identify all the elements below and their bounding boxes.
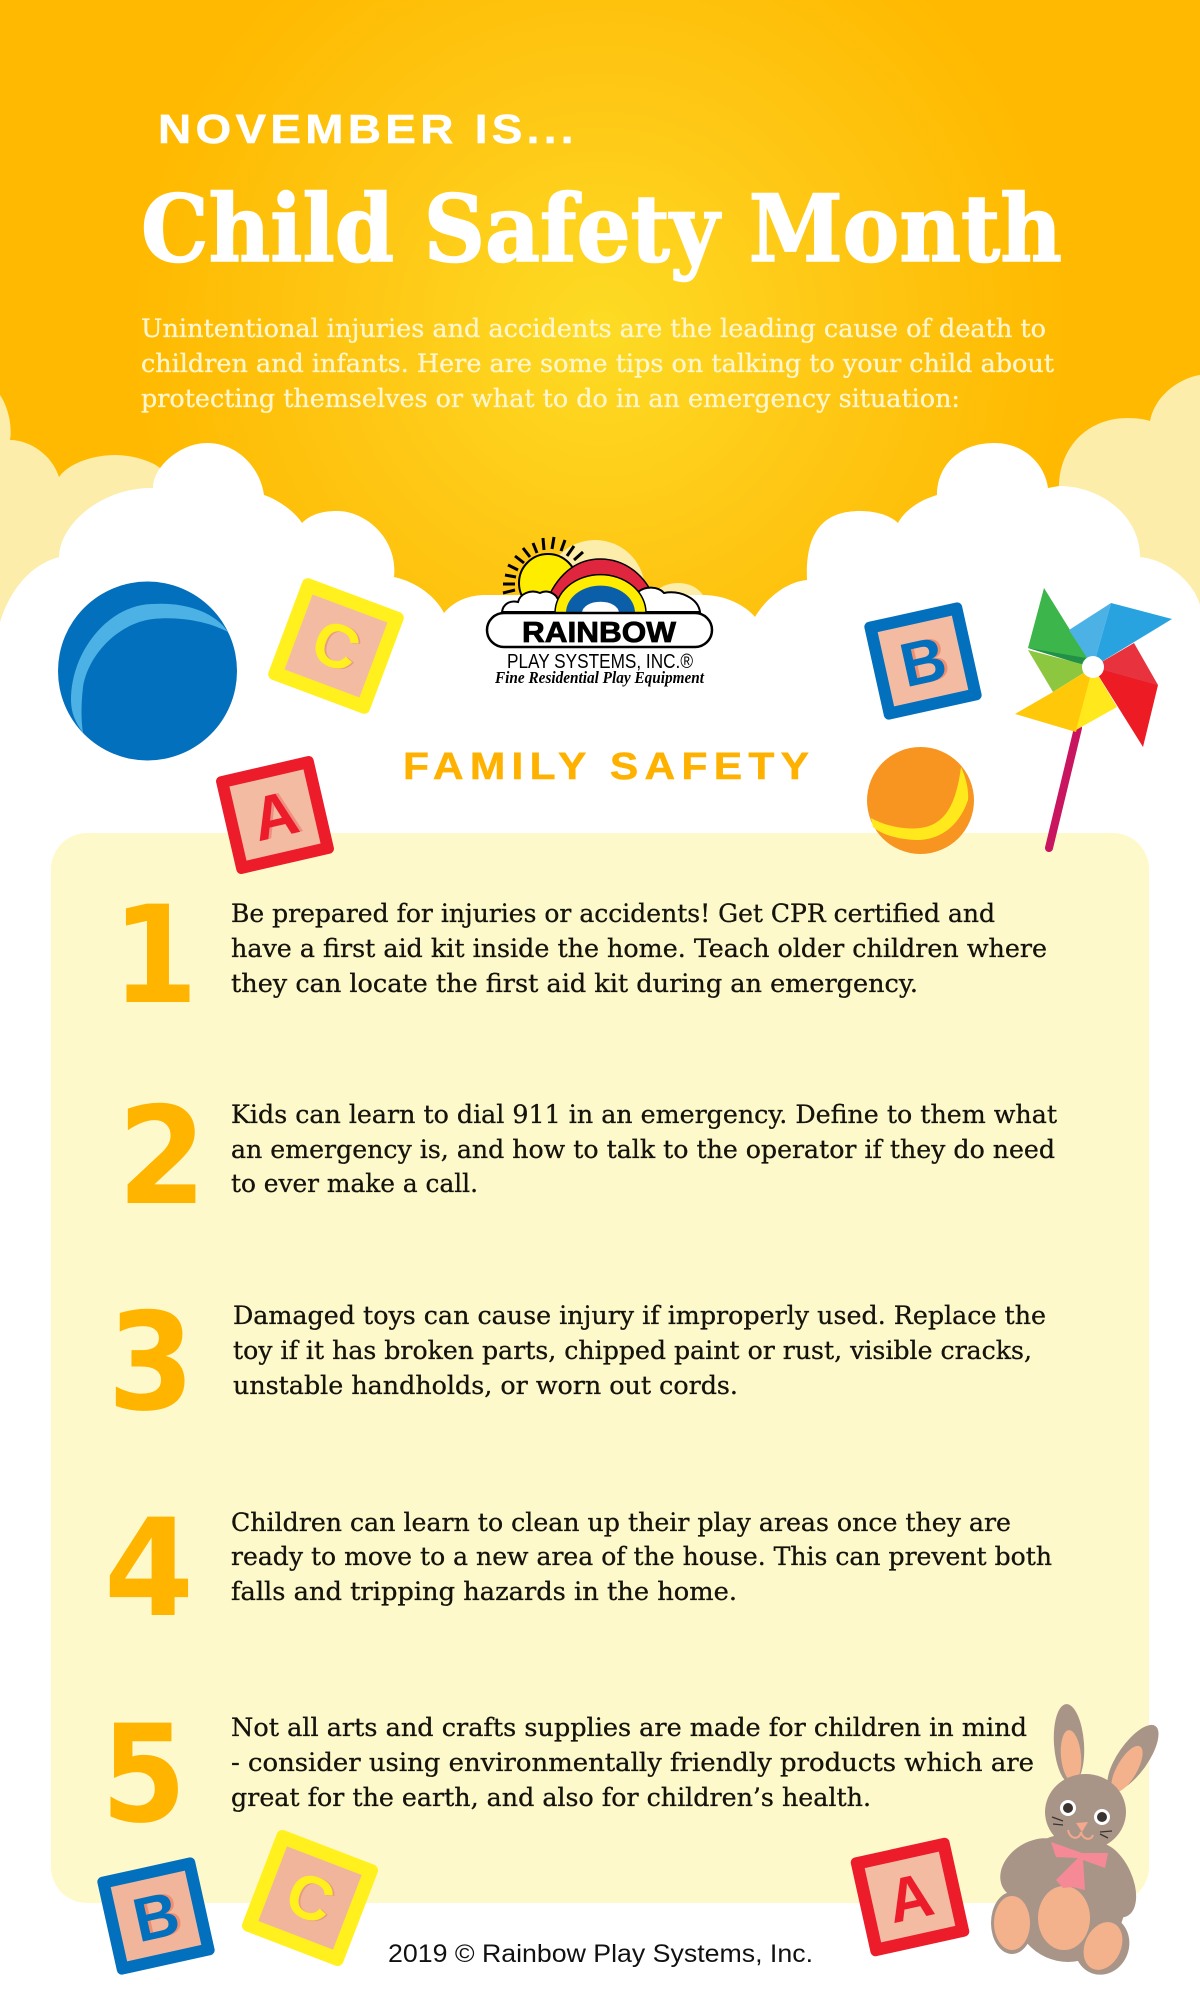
tip 1: they can locate the first aid kit during an emergency. [231,969,918,998]
number 5: 5 [101,1696,186,1853]
icon: block A top: A [249,777,308,854]
cream clouds behind logo [545,540,706,640]
icon: block B top: B [894,624,953,701]
icon: block C bottom [240,1828,380,1968]
tip 1: have a first aid kit inside the home. Teach older children where [231,934,1047,963]
icon: block C top [267,577,405,715]
icon: block B bottom [96,1856,216,1976]
tip 5 [101,1696,1034,1853]
subheading: November is: NOVEMBER IS... [158,107,574,152]
number 1: 1 [112,877,198,1034]
tip 2 [118,1078,1057,1235]
tip 2: an emergency is, and how to talk to the operator if they do need [231,1135,1055,1164]
logo: Rainbow Play Systems [487,537,712,687]
icon: block B bottom: B [130,1878,189,1955]
icon: block C bottom: C [278,1859,345,1939]
icon: block B top [863,601,983,721]
number 3: 3 [108,1284,194,1441]
tip 4 [104,1490,1052,1647]
tip 1: Be prepared for injuries or accidents! Get CPR certified and [231,899,995,928]
tip 5: Not all arts and crafts supplies are made for children in mind [231,1713,1027,1742]
icon: block A bottom [850,1837,970,1957]
number 2: 2 [118,1078,206,1235]
tip 3: toy if it has broken parts, chipped paint or rust, visible cracks, [233,1336,1032,1365]
tip 4: ready to move to a new area of the house. This can prevent both [231,1542,1052,1571]
header background [0,0,1200,660]
tip 1 [112,877,1047,1034]
tip 5: - consider using environmentally friendly products which are [231,1748,1034,1777]
cream clouds right [1059,375,1200,640]
intro text [141,314,1054,413]
icon: block B bottom: B [127,1879,186,1956]
tip 3: Damaged toys can cause injury if improperly used. Replace the [233,1301,1046,1330]
cream clouds left [0,395,160,640]
white cloud bank [0,443,1200,2000]
icon: block C top: C [305,607,371,687]
icon: blue ball [58,582,237,760]
icon: pinwheel [1015,588,1172,848]
intro text: children and infants. Here are some tips on talking to your child about [141,349,1054,378]
icon: block A top: A [246,778,305,855]
intro text: protecting themselves or what to do in an emergency situation: [141,384,960,413]
tip 5: great for the earth, and also for children’s health. [231,1783,871,1812]
logo: Rainbow Play Systems: Fine Residential Play Equipment [494,668,705,687]
icon: orange ball [867,747,974,854]
icon: block A top [215,755,335,875]
tip 4: Children can learn to clean up their play areas once they are [231,1508,1011,1537]
tip 3 [108,1284,1046,1441]
number 4: 4 [104,1490,194,1647]
icon: block C top: C [303,606,369,687]
title: Child Safety Month [141,174,1062,283]
icon: teddy bunny [989,1703,1168,1982]
tip 3: unstable handholds, or worn out cords. [233,1371,738,1400]
tip 4: falls and tripping hazards in the home. [231,1577,737,1606]
icon: block C bottom: C [277,1858,343,1939]
tips panel [51,833,1149,1903]
footer credit: 2019 © Rainbow Play Systems, Inc. [388,1940,813,1968]
heading: Family Safety: FAMILY SAFETY [403,744,809,787]
logo: Rainbow Play Systems: PLAY SYSTEMS, INC.® [507,651,693,673]
icon: block A bottom: A [881,1860,940,1937]
logo: Rainbow Play Systems: RAINBOW [522,617,677,649]
icon: block B top: B [897,623,956,700]
tip 2: to ever make a call. [231,1169,478,1198]
intro text: Unintentional injuries and accidents are the leading cause of death to [141,314,1046,343]
tip 2: Kids can learn to dial 911 in an emergency. Define to them what [231,1100,1057,1129]
